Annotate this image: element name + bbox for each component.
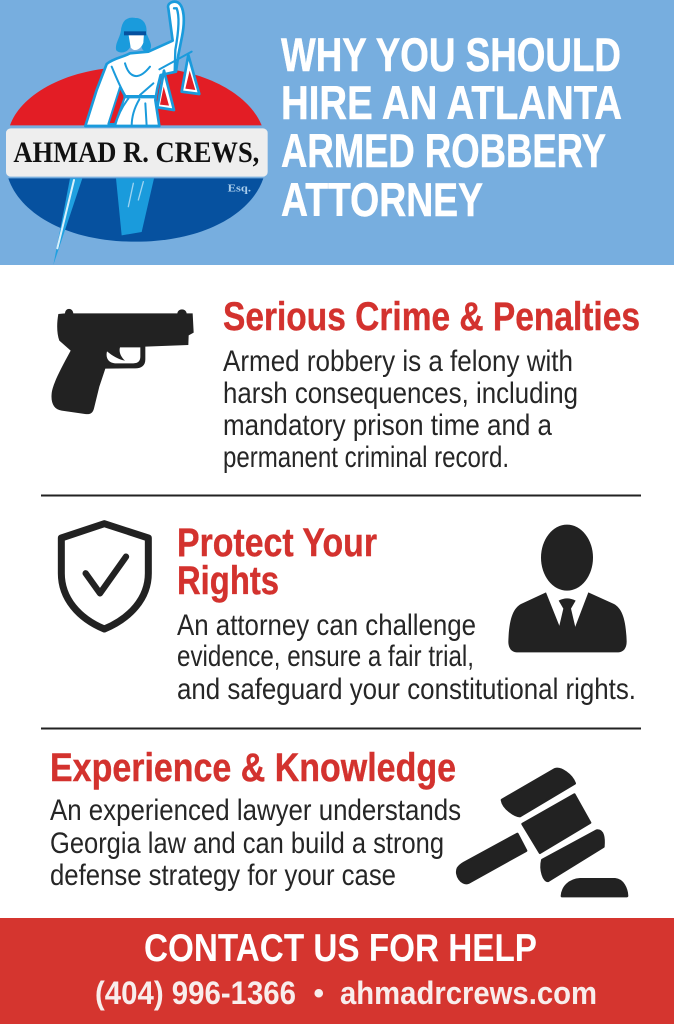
- panel: experience and knowledge: [50, 746, 627, 896]
- logo: Ahmad R. Crews: [6, 2, 268, 265]
- logo oval blue bottom: [8, 178, 263, 242]
- body text: defense strategy for your case: [50, 859, 396, 892]
- body text: evidence, ensure a fair trial,: [177, 640, 474, 673]
- body text: An attorney can challenge: [177, 609, 476, 642]
- panel: serious crime and penalties: [51, 295, 640, 474]
- contact details: ahmadrcrews.com: [340, 975, 597, 1011]
- heading: Experience & Knowledge: [50, 746, 456, 790]
- panel: header background: [0, 0, 674, 265]
- icon: shield with check: [61, 524, 148, 629]
- body text: Georgia law and can build a strong: [50, 827, 444, 860]
- contact details: [95, 975, 597, 1011]
- body text: An experienced lawyer understands: [50, 794, 461, 827]
- icon: handgun: [51, 309, 194, 414]
- body text: harsh consequences, including: [223, 377, 578, 410]
- body text: [223, 345, 578, 474]
- panel: protect your rights: [61, 521, 636, 706]
- title: [281, 28, 622, 226]
- body text: Armed robbery is a felony with: [223, 345, 573, 378]
- logo name: AHMAD R. CREWS,: [13, 136, 259, 169]
- contact details: (404) 996-1366: [95, 975, 296, 1011]
- icon: attorney silhouette: [508, 525, 627, 652]
- contact details: •: [314, 977, 324, 1010]
- heading: Rights: [177, 559, 279, 603]
- body text: [50, 794, 461, 892]
- icon: gavel: [457, 769, 627, 896]
- body text: permanent criminal record.: [223, 441, 509, 474]
- figure: lady justice: [53, 2, 199, 265]
- logo oval red top: [10, 67, 262, 125]
- logo name band: [6, 128, 268, 177]
- heading: [177, 521, 377, 603]
- body text: mandatory prison time and a: [223, 409, 552, 442]
- body text: [177, 609, 636, 706]
- panel: contact footer: [0, 918, 674, 1024]
- logo suffix: Esq.: [228, 183, 251, 194]
- contact heading: CONTACT US FOR HELP: [144, 927, 537, 970]
- title: ATTORNEY: [281, 173, 483, 226]
- heading: Protect Your: [177, 521, 377, 565]
